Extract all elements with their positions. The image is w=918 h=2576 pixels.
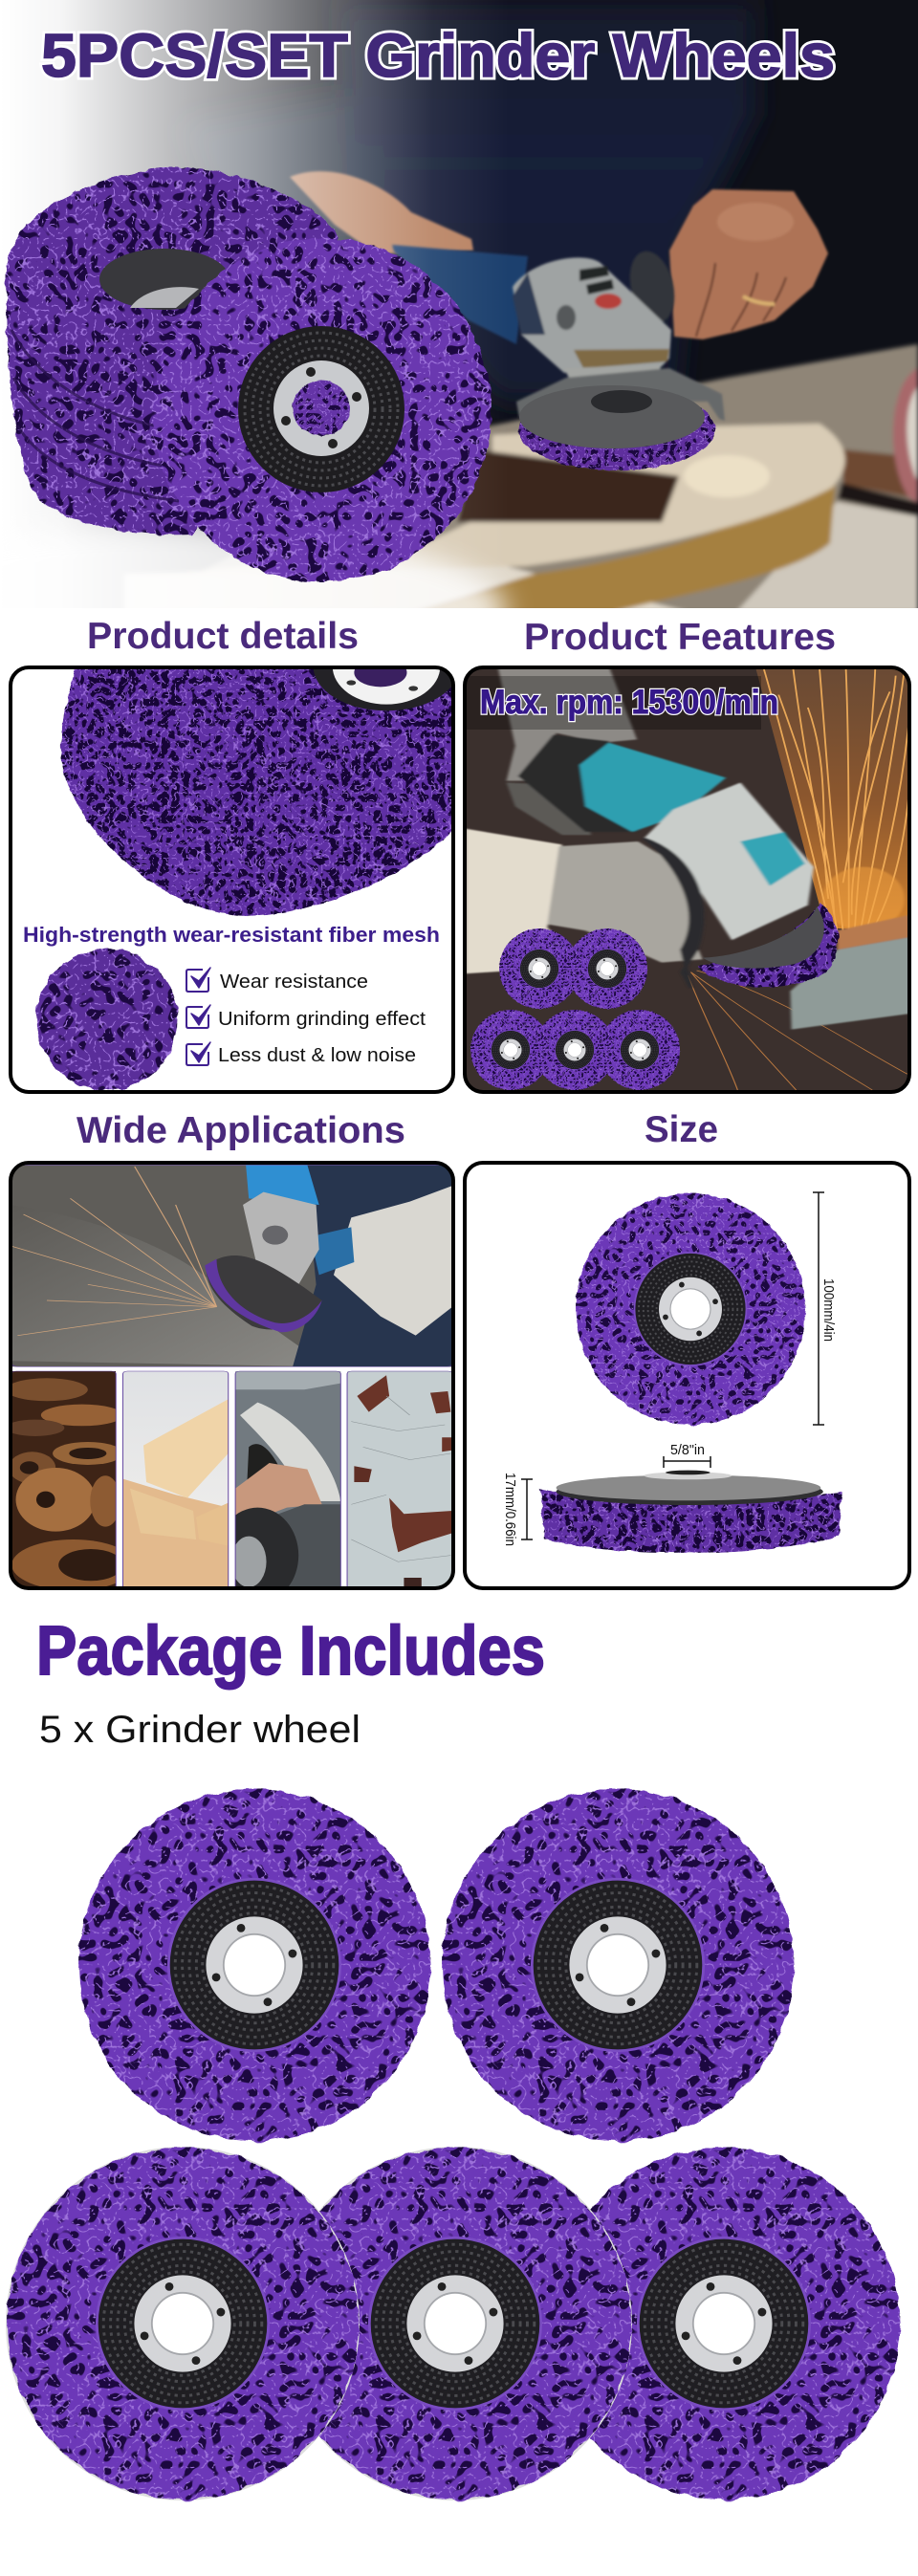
wheel 2 xyxy=(442,1789,794,2141)
dimension: thickness: 17mm/0.66in xyxy=(502,1473,518,1546)
panel: wide applications xyxy=(6,1163,453,1604)
panel: product details xyxy=(11,622,460,1092)
photo: peeling paint xyxy=(347,1371,452,1588)
package wheels xyxy=(6,1789,900,2500)
in-use purple disc on grinder xyxy=(518,385,715,470)
grinder head xyxy=(513,247,725,421)
photo: wood blocks xyxy=(123,1371,229,1588)
feature: uniform grinding effect xyxy=(186,1005,426,1030)
left hand xyxy=(290,171,473,253)
dimension: diameter: 100mm/4in xyxy=(820,1278,837,1342)
dimension: bore xyxy=(664,1442,710,1468)
small wheels set xyxy=(470,928,680,1090)
dimension: thickness xyxy=(502,1473,533,1546)
caption: fiber mesh: High-strength wear-resistant fiber mesh xyxy=(23,923,440,947)
wheel 1 xyxy=(78,1789,430,2141)
heading: size: Size xyxy=(645,1109,718,1150)
label: max rpm: Max. rpm: 15300/min xyxy=(480,684,778,721)
close-up wheel mesh xyxy=(59,669,451,916)
dimension: diameter xyxy=(813,1192,837,1425)
feature: wear resistance xyxy=(186,968,368,993)
dimension: bore: 5/8"in xyxy=(670,1442,705,1458)
wheel 4 xyxy=(279,2148,631,2500)
front wheel xyxy=(153,238,492,582)
heading: product details: Product details xyxy=(87,616,359,657)
feature: uniform grinding effect: Uniform grinding effect xyxy=(218,1009,426,1030)
feature: less dust and low noise: Less dust & low noise xyxy=(218,1045,416,1066)
heading: product features: Product Features xyxy=(524,617,836,658)
panel: size xyxy=(465,1163,909,1588)
main photo: grinding metal sheet xyxy=(11,1165,452,1366)
photo: sanding a car xyxy=(235,1371,340,1586)
wheel 3 xyxy=(7,2148,359,2500)
disc on grinder xyxy=(697,902,839,988)
icon: mesh detail circle xyxy=(36,949,178,1090)
heading: package includes: Package Includes xyxy=(36,1613,545,1690)
text: package contents: 5 x Grinder wheel xyxy=(39,1709,361,1751)
label: max rpm: Max. rpm: 15300/min xyxy=(480,684,778,721)
title: 5PCS/SET Grinder Wheels xyxy=(41,21,835,90)
heading: wide applications: Wide Applications xyxy=(76,1110,405,1151)
panel: product features xyxy=(463,666,913,1095)
photo: rusty brake discs xyxy=(12,1371,117,1586)
wheel front view xyxy=(576,1193,805,1425)
feature: wear resistance: Wear resistance xyxy=(220,971,368,993)
hero photo: grinder in use on wood xyxy=(4,0,918,608)
title: 5PCS/SET Grinder Wheels xyxy=(41,21,835,90)
wheel side view xyxy=(539,1471,842,1553)
wheel 5 xyxy=(548,2148,900,2500)
grinder handle xyxy=(392,245,528,344)
label band xyxy=(467,676,761,730)
wheel stack xyxy=(6,167,339,535)
right hand xyxy=(669,189,828,339)
hero banner xyxy=(4,0,918,608)
photo: grinder with sparks xyxy=(463,666,913,1095)
table and wood slab xyxy=(218,341,918,608)
